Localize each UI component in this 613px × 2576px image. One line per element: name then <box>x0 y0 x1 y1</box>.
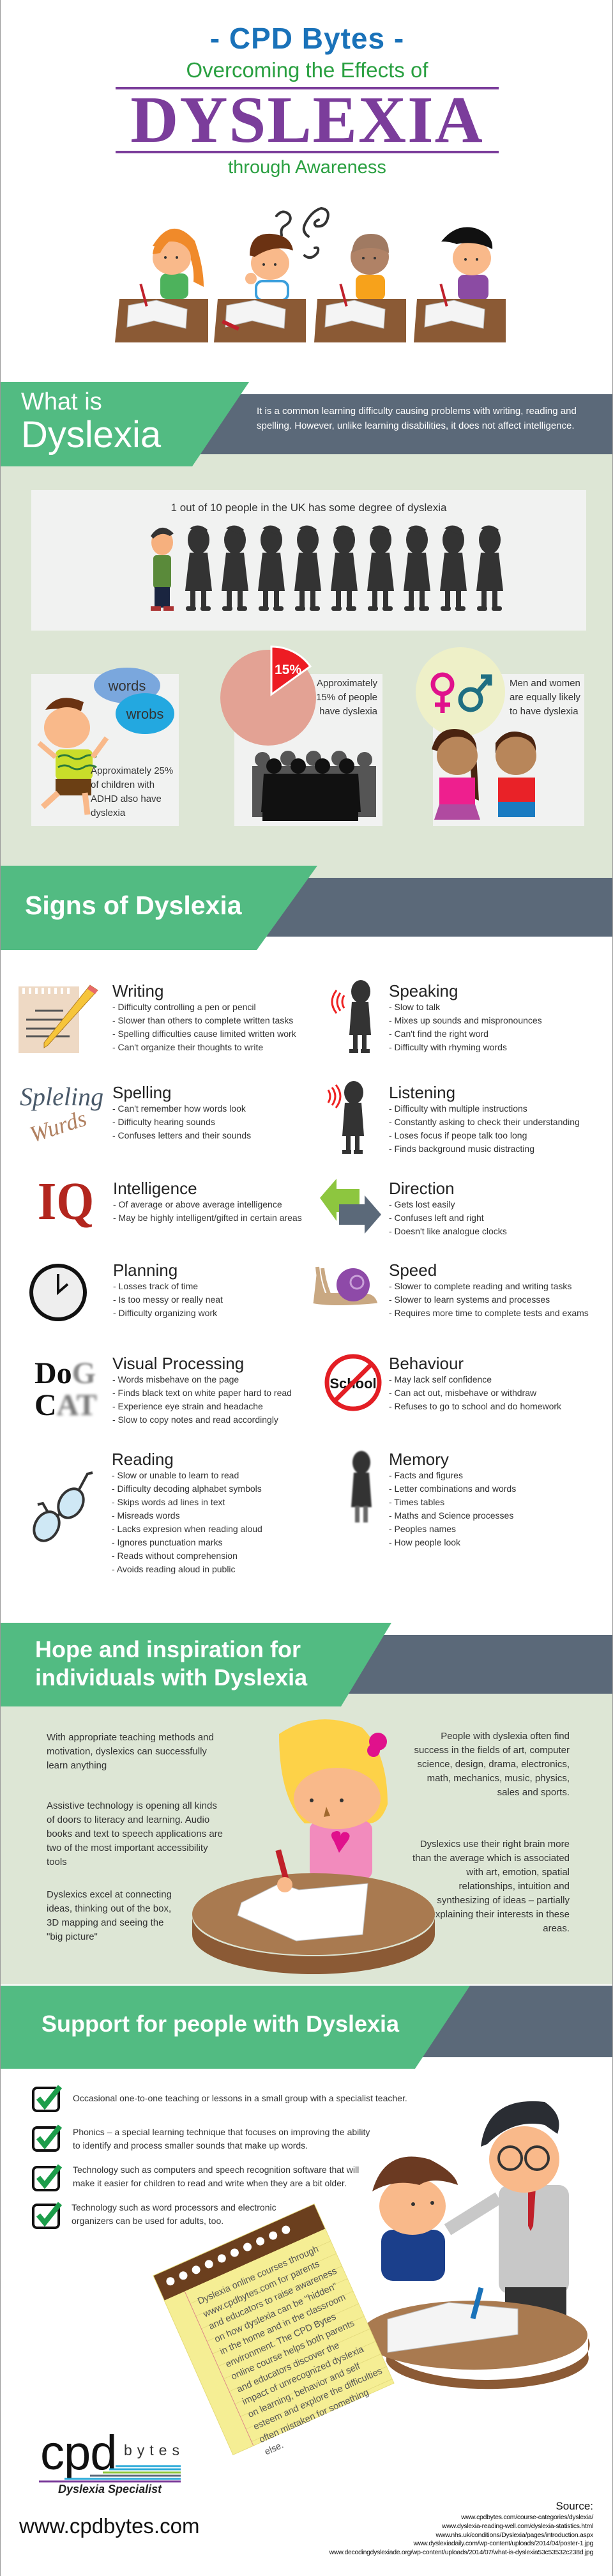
definition text: It is a common learning difficulty causing problems with writing, reading and spelling. However, unlike learning disabilities, it does not affect intelligence. <box>257 406 577 431</box>
sources: www.decodingdyslexiade.org/wp-content/uploads/2014/07/what-is-dyslexia53c53532c238d.jpg <box>329 2549 593 2556</box>
icon: spleling wurds: Spleling <box>20 1082 103 1111</box>
title <box>116 22 499 178</box>
text: Writing <box>112 981 163 1000</box>
people row <box>151 525 503 611</box>
sources: Source: <box>556 2500 593 2512</box>
text: - Experience eye strain and headache <box>112 1401 263 1411</box>
kid 4 <box>441 227 492 300</box>
text: - Slow or unable to learn to read <box>112 1470 239 1480</box>
desks <box>115 284 506 342</box>
icon: arrows <box>320 1179 381 1234</box>
icon: listening figure <box>327 1081 364 1154</box>
text: - Difficulty with multiple instructions <box>389 1103 527 1114</box>
logo: cpd bytes: bytes <box>124 2442 185 2458</box>
item 4: Technology such as word processors and electronic <box>72 2202 276 2212</box>
text: - Skips words ad lines in text <box>112 1497 225 1507</box>
logo tagline: Dyslexia Specialist <box>58 2483 162 2496</box>
sign: listening <box>327 1081 580 1154</box>
text: - Difficulty organizing work <box>113 1308 217 1318</box>
heading: individuals with Dyslexia <box>35 1664 307 1690</box>
text: - Can't find the right word <box>389 1029 488 1039</box>
text: - Difficulty controlling a pen or pencil <box>112 1002 256 1012</box>
logo stripes <box>39 2462 186 2483</box>
background: light green band hope <box>1 1694 613 1984</box>
text: - Words misbehave on the page <box>112 1374 239 1384</box>
notepad binding <box>154 2204 325 2301</box>
sign: behaviour <box>324 1354 561 1411</box>
text: - Difficulty with rhyming words <box>389 1042 507 1052</box>
section header: What is Dyslexia <box>1 382 612 466</box>
sources: www.nhs.uk/conditions/Dyslexia/pages/introduction.aspx <box>436 2531 593 2539</box>
illustration: boy with speech clouds: words <box>108 678 146 694</box>
text: - Can't remember how words look <box>112 1103 246 1114</box>
item 4: organizers can be used for adults, too. <box>72 2216 223 2226</box>
illustration: four kids at desks <box>115 207 506 342</box>
title: overcoming: Overcoming the Effects of <box>186 58 428 82</box>
hope: right texts: People with dyslexia often find success in the fields of art, computer science, design, drama, electronics, math, mechanics, music, physics, sales and sports. <box>414 1731 570 1798</box>
text: Visual Processing <box>112 1354 244 1373</box>
sign: intelligence <box>38 1172 302 1231</box>
illustration: boy with speech clouds: wrobs <box>126 706 163 722</box>
sources <box>282 2499 593 2557</box>
icon: speaking figure <box>331 980 371 1053</box>
text: - Lacks expresion when reading aloud <box>112 1524 262 1534</box>
illustration: girl reading at table <box>189 1719 438 1981</box>
sources: www.dyslexiadaily.com/wp-content/uploads/2014/04/poster-1.jpg <box>413 2540 593 2547</box>
text: - Constantly asking to check their understanding <box>389 1117 580 1127</box>
text <box>112 981 296 1052</box>
text: - Difficulty decoding alphabet symbols <box>112 1483 262 1494</box>
text: - Of average or above average intelligence <box>113 1199 282 1209</box>
heading <box>21 388 161 456</box>
text: - Peoples names <box>389 1524 456 1534</box>
icon: spleling wurds <box>20 1082 103 1147</box>
sources: www.cpdbytes.com/course-categories/dyslexia/ <box>461 2513 593 2521</box>
text: - Letter combinations and words <box>389 1483 516 1494</box>
sign: planning <box>29 1261 223 1321</box>
text: - Finds black text on white paper hard to read <box>112 1388 292 1398</box>
item 4 <box>32 2201 390 2229</box>
sources: www.dyslexia-reading-well.com/dyslexia-statistics.html <box>442 2522 593 2530</box>
icon: DoG CAT: CAT <box>34 1388 97 1422</box>
icon: no school <box>324 1354 382 1411</box>
icon: no school: School <box>329 1376 377 1392</box>
sign: speaking <box>331 980 542 1053</box>
text: - Finds background music distracting <box>389 1144 534 1154</box>
kid 3 <box>351 234 389 300</box>
heading: What is <box>21 388 102 415</box>
text <box>112 1450 262 1576</box>
text: - Loses focus if peope talk too long <box>389 1130 527 1140</box>
text: Planning <box>113 1261 178 1280</box>
text: - Slower to complete reading and writing tasks <box>389 1281 571 1291</box>
title: CPD Bytes: - CPD Bytes - <box>210 22 404 55</box>
icon: IQ: IQ <box>38 1172 94 1231</box>
text: - Maths and Science processes <box>389 1510 513 1521</box>
text: - Ignores punctuation marks <box>112 1537 223 1547</box>
text: - Requires more time to complete tests and exams <box>389 1308 589 1318</box>
icon: DoG CAT <box>34 1356 98 1422</box>
text <box>112 1354 292 1425</box>
callout: notepad <box>154 2204 393 2455</box>
text: - How people look <box>389 1537 460 1547</box>
stat text 15%: Approximately 15% of people have dyslexia <box>316 678 377 717</box>
logo: cpd bytes: cpd <box>40 2426 117 2480</box>
heading: Signs of Dyslexia <box>25 891 242 920</box>
section header: Signs of Dyslexia <box>1 866 612 950</box>
text: - Difficulty hearing sounds <box>112 1117 215 1127</box>
panel: 15% <box>234 674 382 826</box>
support checklist <box>32 2084 390 2231</box>
text: Intelligence <box>113 1179 197 1198</box>
text: Memory <box>389 1450 449 1469</box>
text: - Misreads words <box>112 1510 180 1521</box>
text: Behaviour <box>389 1354 464 1373</box>
section header: Support <box>1 1986 613 2069</box>
text: Listening <box>389 1083 455 1102</box>
icon: notepad pencil <box>19 985 98 1053</box>
text: - Slower than others to complete written tasks <box>112 1015 293 1025</box>
illustration: boy with speech clouds <box>37 668 174 815</box>
text: Direction <box>389 1179 455 1198</box>
item 1: Occasional one-to-one teaching or lessons in a small group with a specialist teacher. <box>73 2093 407 2103</box>
stat text: 1 out of 10 people in the UK has some degree of dyslexia <box>171 502 446 514</box>
hope: excel text: Dyslexics excel at connecting ideas, thinking out of the box, 3D mapping and seeing the "big picture" <box>47 1889 172 1942</box>
item 3 <box>32 2163 390 2191</box>
text <box>389 1450 516 1549</box>
text: - Facts and figures <box>389 1470 463 1480</box>
text: - Mixes up sounds and mispronounces <box>389 1015 542 1025</box>
heading <box>35 1636 307 1692</box>
text <box>389 1179 507 1236</box>
text <box>113 1261 223 1318</box>
item 2: Phonics – a special learning technique that focuses on improving the ability <box>73 2127 370 2137</box>
item 3: make it easier for children to read and write when they are a bit older. <box>73 2178 347 2188</box>
illustration: teacher and boy at table <box>358 2096 594 2402</box>
title: DYSLEXIA: DYSLEXIA <box>130 83 484 157</box>
pie chart 15% <box>220 645 316 746</box>
text <box>389 1083 580 1154</box>
text: - Times tables <box>389 1497 444 1507</box>
kid 2 boy thinking <box>245 234 293 300</box>
title: through awareness: through Awareness <box>228 157 386 178</box>
icon: spleling wurds: Wurds <box>27 1105 89 1147</box>
text: - Slower to learn systems and processes <box>389 1294 550 1305</box>
section header: Hope and inspiration <box>1 1623 613 1706</box>
text: - Doesn't like analogue clocks <box>389 1226 507 1236</box>
text <box>389 981 542 1052</box>
question marks <box>276 208 328 257</box>
item 3: Technology such as computers and speech recognition software that will <box>73 2165 359 2175</box>
text: - May be highly intelligent/gifted in certain areas <box>113 1213 302 1223</box>
sign: speed <box>313 1261 589 1318</box>
panel: 1 out of 10 <box>31 490 586 631</box>
background: light green band what-is <box>1 454 613 878</box>
sign: reading <box>19 1450 306 1577</box>
sign: visual processing <box>34 1354 292 1425</box>
text: - Can't organize their thoughts to write <box>112 1042 263 1052</box>
text: - Losses track of time <box>113 1281 198 1291</box>
sign: direction <box>320 1179 507 1236</box>
pie chart 15%: 15% <box>275 663 301 677</box>
text: - Can act out, misbehave or withdraw <box>389 1388 536 1398</box>
text: Speaking <box>389 981 458 1000</box>
sign: spelling <box>20 1082 251 1147</box>
stat text: Approximately 25% of children with ADHD also have dyslexia <box>91 765 173 818</box>
stat text gender: Men and women are equally likely to have dyslexia <box>510 678 580 717</box>
icon: snail <box>313 1266 377 1305</box>
hope: left texts: With appropriate teaching methods and motivation, dyslexics can successfully learn anything <box>47 1732 214 1771</box>
heading: Support for people with Dyslexia <box>42 2011 399 2037</box>
sign: memory <box>342 1450 598 1545</box>
text: - Refuses to go to school and do homework <box>389 1401 561 1411</box>
website url: www.cpdbytes.com <box>19 2514 199 2538</box>
text <box>389 1354 561 1411</box>
notepad text: Dyslexia online courses through www.cpdbytes.com for parents and educators to raise awareness on how dyslexia can be "hidden" in the home and in the classroom environment. The CPD Bytes online course helps both parents and educators discover the impact of unrecognized dyslexia on learning, behavior and self esteem and explore the difficulties often mistaken for something else. <box>196 2244 384 2457</box>
icon: clock <box>29 1264 87 1321</box>
panel: ADHD <box>31 674 179 826</box>
icon: glasses <box>29 1471 102 1545</box>
text: Speed <box>389 1261 437 1280</box>
text: - Slow to talk <box>389 1002 440 1012</box>
item 1 <box>32 2084 390 2112</box>
illustration: two children <box>432 729 536 820</box>
text: - Confuses letters and their sounds <box>112 1130 251 1140</box>
kid 1 girl <box>153 229 204 299</box>
logo: cpd bytes <box>39 2428 192 2498</box>
hope: assistive technology text: Assistive technology is opening all kinds of doors to literacy and learning. Audio books and text to speech applications are two of the most important accessibility tools <box>47 1800 223 1867</box>
text <box>389 1261 589 1318</box>
item 2 <box>32 2124 390 2153</box>
text: - Confuses left and right <box>389 1213 484 1223</box>
text: - Avoids reading aloud in public <box>112 1564 236 1574</box>
text: Reading <box>112 1450 174 1469</box>
text: - Gets lost easily <box>389 1199 455 1209</box>
hope: right brain text: Dyslexics use their right brain more than the average which is associated with art, emotion, spatial relationships, intuition and synthesizing of ideas – partially explaining their interests in these areas. <box>412 1839 570 1934</box>
text: - Slow to copy notes and read accordingly <box>112 1414 278 1425</box>
gender symbols bubble <box>416 647 505 735</box>
text: - Spelling difficulties cause limited written work <box>112 1029 296 1039</box>
icon: fading figure <box>342 1450 381 1525</box>
item 2: to identify and process smaller sounds that make up words. <box>73 2140 308 2150</box>
heading: Hope and inspiration for <box>35 1636 301 1662</box>
text: Spelling <box>112 1083 172 1102</box>
text: - Reads without comprehension <box>112 1551 238 1561</box>
panel: gender <box>433 674 584 826</box>
text <box>112 1083 251 1140</box>
heading: Dyslexia <box>21 414 161 456</box>
text: - May lack self confidence <box>389 1374 492 1384</box>
crowd silhouettes <box>252 751 376 821</box>
sign: writing <box>19 981 296 1053</box>
icon: DoG CAT: DoG <box>34 1356 96 1390</box>
text <box>113 1179 302 1223</box>
text: - Is too messy or really neat <box>113 1294 223 1305</box>
